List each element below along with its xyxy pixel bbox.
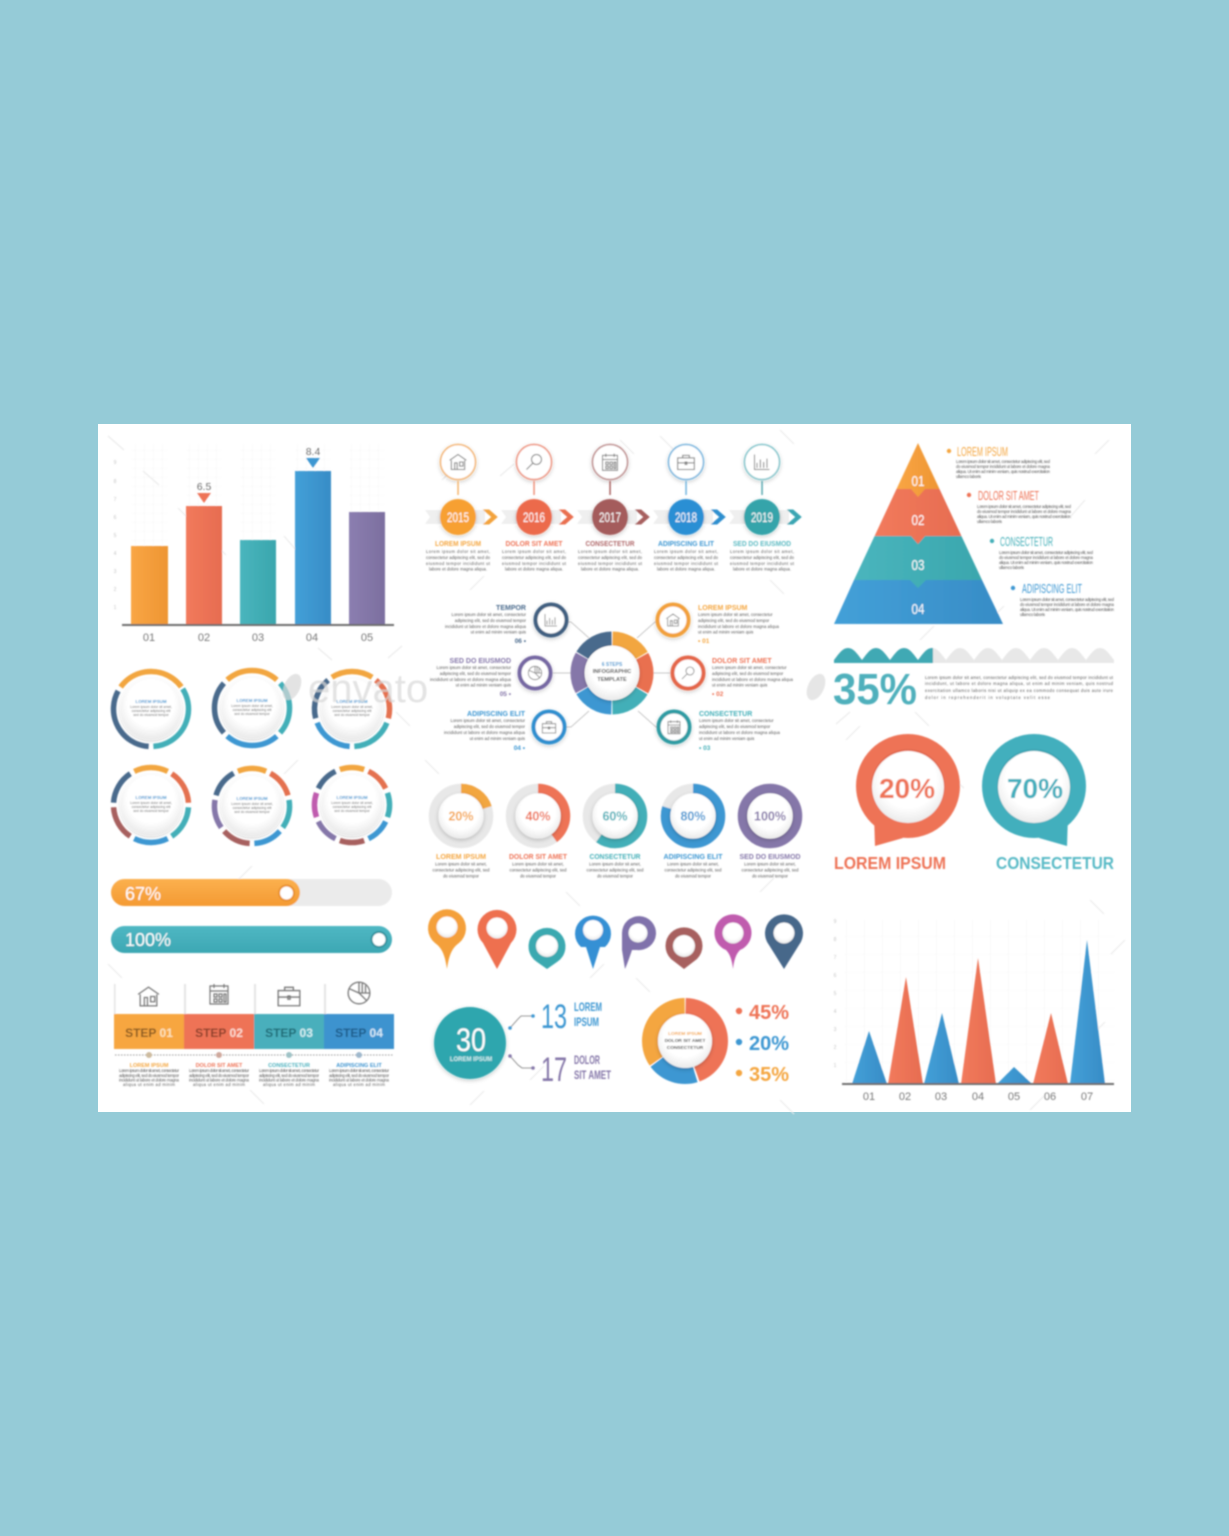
panel: bar chart: 03	[252, 632, 264, 644]
timeline step 2018	[653, 444, 725, 572]
satellite: sed do eiusmod: ut enim ad minim veniam quis	[456, 682, 511, 688]
satellite: consectetur: Lorem ipsum dolor sit amet, consectetur	[699, 718, 774, 723]
panel: bar chart: 4	[114, 551, 117, 557]
satellite: consectetur: adipiscing elit, sed do eiusmod tempor	[699, 724, 771, 729]
donut 100%: consectetur adipiscing elit, sed	[741, 868, 799, 872]
donut 100%: SED DO EIUSMOD	[740, 854, 800, 861]
satellite: dolor sit amet: DOLOR SIT AMET	[712, 658, 772, 665]
donut 80%: consectetur adipiscing elit, sed	[664, 868, 722, 872]
satellite: lorem ipsum: LOREM IPSUM	[698, 605, 748, 612]
panel: four step process: CONSECTETUR	[268, 1063, 310, 1069]
panel: bar chart: 01	[143, 632, 155, 644]
panel: donut chart with legend: LOREM IPSUM	[668, 1031, 702, 1037]
satellite: lorem ipsum: incididunt ut labore et dolore magna aliqua	[698, 624, 780, 629]
ring: seven segments: consectetur adipiscing elit	[233, 806, 271, 810]
hub ring: 6 STEPS	[602, 662, 623, 668]
pyramid label 2: Lorem ipsum dolor sit amet, consectetur adipiscing elit, sed	[977, 504, 1072, 509]
timeline step 2017	[577, 444, 649, 572]
panel: bar chart: 02	[198, 632, 210, 644]
satellite: adipiscing elit	[444, 711, 564, 752]
donut 60%: Lorem ipsum dolor sit amet,	[589, 862, 641, 866]
panel: pyramid: 03	[912, 557, 924, 574]
ring: four segments: LOREM IPSUM	[237, 698, 268, 703]
panel: cone chart: 06	[1044, 1091, 1056, 1103]
hub ring: TEMPLATE	[597, 677, 627, 683]
donut 60%: 60%	[602, 810, 628, 824]
timeline step 2018: 2018	[675, 509, 697, 525]
watermark: envato	[308, 667, 428, 711]
panel: four step process: aliqua ut enim ad minim	[333, 1082, 386, 1087]
callout: 70% speech bubble: CONSECTETUR	[996, 853, 1114, 873]
ring: six segments: LOREM IPSUM	[136, 795, 167, 800]
satellite: sed do eiusmod: incididunt ut labore et dolore magna aliqua	[430, 677, 512, 682]
timeline step 2018: ADIPISCING ELIT	[658, 541, 715, 548]
panel: 35% wave meter: incididunt, ut labore et dolore magna aliqua, ut enim ad minim veniam, quis nostrud	[925, 681, 1114, 686]
pyramid label 4: aliqua. Ut enim ad minim veniam, quis nostrud exercitation	[1020, 607, 1115, 612]
panel: pyramid	[834, 443, 1115, 624]
panel: four step process: STEP 04	[335, 1026, 383, 1040]
progress bar 67%	[111, 879, 392, 906]
panel: donut chart with legend: CONSECTETUR	[667, 1045, 704, 1051]
ring: six segments: consectetur adipiscing elit	[132, 805, 170, 809]
ring: six segments: sed do eiusmod tempor	[133, 809, 170, 813]
panel: cone chart: 6	[834, 973, 837, 979]
panel: four step process: STEP 02	[195, 1026, 243, 1040]
donut 40%: do eiusmod tempor	[520, 874, 557, 878]
panel: cone chart: 7	[834, 955, 837, 961]
satellite: lorem ipsum	[658, 604, 780, 645]
pyramid label 1: aliqua. Ut enim ad minim veniam, quis nostrud exercitation	[956, 469, 1051, 474]
panel: four step process: adipiscing elit, sed do eiusmod tempor	[259, 1073, 320, 1078]
timeline step 2017: 2017	[599, 509, 621, 525]
satellite: dolor sit amet: • 02	[712, 691, 724, 698]
satellite: consectetur: incididunt ut labore et dolore magna aliqua	[699, 730, 781, 735]
pyramid label 1: do eiusmod tempor incididunt ut labore et dolore magna	[956, 464, 1051, 469]
panel: four step process: Lorem ipsum dolor sit amet, consectetur	[119, 1068, 180, 1073]
donut 80%: 80%	[680, 810, 706, 824]
donut 100%: do eiusmod tempor	[752, 874, 789, 878]
pyramid label 3: do eiusmod tempor incididunt ut labore et dolore magna	[999, 555, 1094, 560]
pyramid label 1: Lorem ipsum dolor sit amet, consectetur adipiscing elit, sed	[956, 459, 1051, 464]
ring: five segments: consectetur adipiscing elit	[333, 709, 371, 713]
ring: eight segments: LOREM IPSUM	[337, 795, 368, 800]
satellite: dolor sit amet	[672, 658, 794, 698]
panel: bar chart: 2	[114, 587, 117, 593]
panel: 30 split stat: SIT AMET	[574, 1068, 611, 1082]
satellite: lorem ipsum: adipiscing elit, sed do eiusmod tempor	[698, 618, 770, 623]
satellite: sed do eiusmod: adipiscing elit, sed do eiusmod tempor	[440, 671, 512, 676]
satellite: sed do eiusmod: 05 •	[500, 691, 512, 698]
donut 20%: LOREM IPSUM	[436, 854, 486, 861]
panel: donut chart with legend: 20%	[749, 1033, 789, 1055]
satellite: dolor sit amet: adipiscing elit, sed do eiusmod tempor	[712, 671, 784, 676]
satellite: tempor: incididunt ut labore et dolore magna aliqua	[445, 624, 527, 629]
timeline step 2017: eiusmod tempor incididunt ut	[578, 561, 643, 566]
donut 20%: do eiusmod tempor	[443, 874, 480, 878]
panel: four step process: Lorem ipsum dolor sit amet, consectetur	[259, 1068, 320, 1073]
panel: cone chart: 05	[1008, 1091, 1020, 1103]
satellite: tempor	[445, 604, 566, 645]
panel: bar chart	[114, 444, 394, 644]
pin teal	[528, 928, 566, 969]
panel: four step process: ADIPISCING ELIT	[336, 1063, 382, 1069]
panel: 35% wave meter	[833, 647, 1114, 706]
pin purple	[622, 916, 656, 969]
timeline step 2015: LOREM IPSUM	[435, 541, 481, 548]
progress bar 67%: 67%	[125, 884, 161, 904]
panel: bar chart: 8	[114, 479, 117, 485]
ring: three segments	[99, 657, 203, 761]
panel: 30 split stat: 13	[541, 998, 567, 1036]
panel: cone chart: 03	[935, 1091, 947, 1103]
timeline step 2019: eiusmod tempor incididunt ut	[730, 561, 795, 566]
satellite: tempor: TEMPOR	[496, 605, 526, 612]
panel: 30 split stat: IPSUM	[574, 1015, 599, 1029]
timeline step 2016: Lorem ipsum dolor sit amet,	[502, 549, 566, 554]
ring: four segments: Lorem ipsum dolor sit amet,	[231, 704, 273, 708]
pin magenta	[714, 914, 752, 969]
timeline step 2018: Lorem ipsum dolor sit amet,	[654, 549, 718, 554]
panel: donut chart with legend: 35%	[749, 1064, 789, 1086]
donut 100%: Lorem ipsum dolor sit amet,	[744, 862, 796, 866]
donut 20%: Lorem ipsum dolor sit amet,	[435, 862, 487, 866]
panel: cone chart: 02	[899, 1091, 911, 1103]
callout: 70% speech bubble	[982, 734, 1114, 873]
timeline step 2015: Lorem ipsum dolor sit amet,	[426, 549, 490, 554]
pyramid label 4	[1011, 581, 1115, 617]
panel: four step process: STEP 03	[265, 1026, 313, 1040]
ring: three segments: consectetur adipiscing elit	[132, 709, 170, 713]
pyramid label 1: LOREM IPSUM	[957, 444, 1008, 459]
satellite: tempor: ut enim ad minim veniam quis	[471, 630, 526, 634]
panel: bar chart: 5	[114, 533, 117, 539]
donut 60%: do eiusmod tempor	[597, 874, 634, 878]
panel: 30 split stat	[434, 998, 611, 1089]
pyramid label 4: Lorem ipsum dolor sit amet, consectetur adipiscing elit, sed	[1020, 597, 1115, 602]
satellite: sed do eiusmod: SED DO EIUSMOD	[450, 658, 511, 665]
timeline step 2015	[425, 444, 497, 572]
pyramid label 3: aliqua. Ut enim ad minim veniam, quis nostrud exercitation	[999, 560, 1094, 565]
pyramid label 3	[990, 534, 1094, 570]
panel: pyramid: 02	[912, 512, 924, 529]
panel: pyramid: 01	[912, 473, 924, 490]
donut 80%: ADIPISCING ELIT	[664, 854, 723, 861]
panel: bar chart: 8.4	[306, 446, 320, 458]
progress bar 100%	[111, 926, 392, 953]
ring: three segments: Lorem ipsum dolor sit amet,	[130, 705, 172, 709]
panel: four step process: Lorem ipsum dolor sit amet, consectetur	[189, 1068, 250, 1073]
ring: five segments: LOREM IPSUM	[337, 699, 368, 704]
satellite: dolor sit amet: incididunt ut labore et dolore magna aliqua	[712, 677, 794, 682]
panel: four step process: adipiscing elit, sed do eiusmod tempor	[119, 1073, 180, 1078]
callout: 20% speech bubble	[834, 734, 960, 873]
ring: four segments	[199, 655, 305, 761]
pyramid label 2: DOLOR SIT AMET	[978, 488, 1039, 503]
ring: eight segments: consectetur adipiscing elit	[333, 805, 371, 809]
ring: seven segments: LOREM IPSUM	[237, 796, 268, 801]
panel: bar chart: 05	[361, 632, 373, 644]
pin brown	[666, 927, 703, 969]
panel: four step process: STEP 01	[125, 1026, 173, 1040]
ring: six segments	[99, 753, 203, 857]
pin orange	[428, 909, 466, 969]
timeline step 2016: consectetur adipiscing elit, sed do	[502, 555, 567, 560]
satellite: consectetur	[658, 711, 781, 752]
ring: five segments: Lorem ipsum dolor sit amet,	[331, 705, 373, 709]
panel: map pins	[428, 909, 803, 969]
panel: bar chart: 3	[114, 569, 117, 575]
panel: cone chart: 3	[834, 1027, 837, 1033]
satellite: consectetur: • 03	[699, 745, 711, 752]
satellite: adipiscing elit: adipiscing elit, sed do eiusmod tempor	[454, 724, 526, 729]
timeline step 2016: 2016	[523, 509, 545, 525]
panel: four step process: DOLOR SIT AMET	[196, 1063, 243, 1069]
satellite: dolor sit amet: ut enim ad minim veniam quis	[712, 682, 767, 688]
satellite: tempor: Lorem ipsum dolor sit amet, consectetur	[452, 612, 527, 617]
panel: cone chart: 8	[834, 937, 837, 943]
timeline step 2017: labore et dolore magna aliqua.	[581, 566, 639, 572]
satellite: adipiscing elit: Lorem ipsum dolor sit amet, consectetur	[451, 718, 526, 723]
satellite: consectetur: CONSECTETUR	[699, 711, 752, 718]
donut 60%: consectetur adipiscing elit, sed	[586, 868, 644, 872]
panel: cone chart: 4	[834, 1009, 837, 1015]
donut 80%: do eiusmod tempor	[675, 874, 712, 878]
panel: cone chart: 01	[863, 1091, 875, 1103]
timeline step 2019: Lorem ipsum dolor sit amet,	[730, 549, 794, 554]
timeline step 2019: 2019	[751, 509, 773, 525]
satellite: adipiscing elit: ut enim ad minim veniam quis	[470, 736, 525, 741]
panel: four step process: incididunt ut labore et dolore magna	[189, 1078, 250, 1082]
panel: bar chart: 6	[114, 515, 117, 521]
hub ring	[565, 626, 659, 720]
ring: seven segments	[199, 753, 305, 859]
timeline step 2016: DOLOR SIT AMET	[506, 541, 563, 548]
panel: cone chart: 2	[834, 1045, 837, 1051]
panel: four step process: incididunt ut labore et dolore magna	[119, 1078, 180, 1082]
panel: four step process: adipiscing elit, sed do eiusmod tempor	[189, 1073, 250, 1078]
panel: bar chart: 04	[306, 632, 318, 644]
panel: 30 split stat: LOREM IPSUM	[450, 1057, 492, 1063]
pyramid label 1	[947, 444, 1051, 479]
donut 40%: 40%	[525, 810, 551, 824]
panel: cone chart: 07	[1081, 1091, 1093, 1103]
panel: 30 split stat: 17	[541, 1051, 567, 1089]
donut 40%: Lorem ipsum dolor sit amet,	[512, 862, 564, 866]
timeline step 2019	[729, 444, 801, 572]
panel: four step process: Lorem ipsum dolor sit amet, consectetur	[329, 1068, 390, 1073]
ring: four segments: consectetur adipiscing elit	[233, 708, 271, 712]
pyramid label 4: ullamco laboris	[1020, 612, 1045, 617]
callout: 20% speech bubble: LOREM IPSUM	[834, 853, 946, 873]
timeline step 2017: Lorem ipsum dolor sit amet,	[578, 549, 642, 554]
panel: four step process: incididunt ut labore et dolore magna	[329, 1078, 390, 1082]
ring: eight segments: sed do eiusmod tempor	[334, 809, 371, 813]
donut 60%	[586, 788, 644, 878]
panel: bar chart: 6.5	[197, 481, 211, 493]
satellite: adipiscing elit: incididunt ut labore et dolore magna aliqua	[444, 730, 526, 735]
donut 60%: CONSECTETUR	[590, 854, 640, 861]
timeline step 2019: SED DO EIUSMOD	[733, 541, 791, 548]
panel: donut chart with legend: DOLOR SIT AMET	[665, 1038, 705, 1044]
panel: 30 split stat: LOREM	[574, 1000, 602, 1014]
panel: cone chart: 5	[834, 991, 837, 997]
timeline step 2015: 2015	[447, 509, 469, 525]
ring: six segments: Lorem ipsum dolor sit amet,	[130, 801, 172, 805]
ring: five segments: sed do eiusmod tempor	[334, 713, 371, 717]
pin red	[477, 910, 516, 969]
satellite: adipiscing elit: ADIPISCING ELIT	[467, 711, 526, 718]
satellite: consectetur: ut enim ad minim veniam quis	[699, 736, 754, 741]
donut 20%	[432, 788, 490, 878]
timeline step 2015: labore et dolore magna aliqua.	[429, 566, 487, 572]
panel: four step process: incididunt ut labore et dolore magna	[259, 1078, 320, 1082]
ring: eight segments: Lorem ipsum dolor sit amet,	[331, 801, 373, 805]
timeline step 2019: labore et dolore magna aliqua.	[733, 566, 791, 572]
pyramid label 3: Lorem ipsum dolor sit amet, consectetur adipiscing elit, sed	[999, 550, 1094, 555]
panel: four step process: LOREM IPSUM	[130, 1063, 169, 1069]
panel: 30 split stat: 30	[456, 1022, 486, 1058]
timeline step 2015: eiusmod tempor incididunt ut	[426, 561, 491, 566]
donut 40%	[509, 788, 568, 878]
panel: four step process: aliqua ut enim ad minim	[123, 1082, 176, 1087]
donut 100%: 100%	[754, 810, 786, 824]
donut 40%: DOLOR SIT AMET	[509, 854, 568, 861]
ring: seven segments: sed do eiusmod tempor	[234, 810, 271, 814]
watermark	[279, 667, 829, 711]
pin navy	[765, 914, 803, 969]
panel: bar chart: 1	[114, 605, 117, 611]
timeline step 2017: consectetur adipiscing elit, sed do	[578, 555, 643, 560]
panel: cone chart: 1	[834, 1063, 837, 1069]
panel: cone chart: 9	[834, 919, 837, 925]
donut 20%: 20%	[448, 810, 474, 824]
satellite: lorem ipsum: Lorem ipsum dolor sit amet, consectetur	[698, 612, 773, 617]
panel: 35% wave meter: 35%	[833, 665, 917, 714]
panel: bar chart: 7	[114, 497, 117, 503]
pyramid label 2: do eiusmod tempor incididunt ut labore et dolore magna	[977, 509, 1072, 514]
panel: bar chart: 9	[114, 460, 117, 466]
satellite: tempor: adipiscing elit, sed do eiusmod tempor	[455, 618, 527, 623]
satellite: sed do eiusmod: Lorem ipsum dolor sit amet, consectetur	[437, 665, 512, 670]
timeline step 2015: consectetur adipiscing elit, sed do	[426, 555, 491, 560]
timeline step 2016	[501, 444, 573, 572]
pyramid label 4: do eiusmod tempor incididunt ut labore et dolore magna	[1020, 602, 1115, 607]
hub ring: INFOGRAPHIC	[593, 669, 631, 675]
panel: donut chart with legend: 45%	[749, 1002, 789, 1024]
pyramid label 3: CONSECTETUR	[1000, 534, 1053, 549]
timeline step 2018: eiusmod tempor incididunt ut	[654, 561, 719, 566]
progress bar 100%: 100%	[125, 930, 171, 950]
panel: pyramid: 04	[912, 601, 924, 618]
ring: four segments: sed do eiusmod tempor	[234, 712, 271, 716]
ring: eight segments	[302, 755, 402, 855]
timeline step 2018: consectetur adipiscing elit, sed do	[654, 555, 719, 560]
ring: seven segments: Lorem ipsum dolor sit amet,	[231, 802, 273, 806]
panel: four step process	[114, 982, 394, 1087]
panel: six-step hub diagram	[430, 604, 794, 752]
timeline step 2016: labore et dolore magna aliqua.	[505, 566, 563, 572]
donut 80%	[664, 788, 723, 878]
panel: cone chart: 04	[972, 1091, 984, 1103]
timeline step 2019: consectetur adipiscing elit, sed do	[730, 555, 795, 560]
panel: 30 split stat: DOLOR	[574, 1053, 600, 1067]
callout: 20% speech bubble: 20%	[879, 773, 935, 804]
panel: four step process: aliqua ut enim ad minim	[193, 1082, 246, 1087]
donut 20%: consectetur adipiscing elit, sed	[432, 868, 490, 872]
donut 100%	[740, 788, 800, 878]
ring: three segments: sed do eiusmod tempor	[133, 713, 170, 717]
satellite: lorem ipsum: • 01	[698, 638, 710, 645]
pyramid label 4: ADIPISCING ELIT	[1022, 581, 1082, 596]
panel: 35% wave meter: Lorem ipsum dolor sit amet, consectetur adipiscing elit, sed do eiusmod tempor incididunt ut	[925, 675, 1114, 680]
satellite: tempor: 06 •	[515, 638, 527, 645]
panel: cone chart	[834, 919, 1115, 1103]
panel: six circular step diagrams	[99, 655, 405, 859]
pyramid label 2: aliqua. Ut enim ad minim veniam, quis nostrud exercitation	[977, 514, 1072, 519]
panel: donut chart with legend	[636, 992, 789, 1090]
panel: percentage donuts	[432, 788, 800, 878]
pyramid label 2: ullamco laboris	[977, 519, 1002, 524]
panel: 35% wave meter: dolor in reprehenderit in voluptate velit esse	[925, 695, 1051, 700]
ring: five segments	[299, 656, 405, 762]
timeline step 2016: eiusmod tempor incididunt ut	[502, 561, 567, 566]
satellite: lorem ipsum: ut enim ad minim veniam quis	[698, 630, 753, 634]
timeline step 2018: labore et dolore magna aliqua.	[657, 566, 715, 572]
panel: 35% wave meter: exercitation ullamco laboris nisi ut aliquip ex ea commodo consequat duis aute irure	[925, 688, 1114, 693]
satellite: dolor sit amet: Lorem ipsum dolor sit amet, consectetur	[712, 665, 787, 670]
satellite: sed do eiusmod	[430, 658, 550, 698]
satellite: adipiscing elit: 04 •	[514, 745, 526, 752]
panel: four step process: adipiscing elit, sed do eiusmod tempor	[329, 1073, 390, 1078]
pyramid label 1: ullamco laboris	[956, 474, 981, 479]
pyramid label 3: ullamco laboris	[999, 565, 1024, 570]
timeline step 2017: CONSECTETUR	[586, 541, 634, 548]
ring: three segments: LOREM IPSUM	[136, 699, 167, 704]
white infographic panel	[98, 424, 1131, 1112]
pyramid label 2	[967, 488, 1072, 524]
pin blue	[575, 916, 611, 969]
callout: 70% speech bubble: 70%	[1007, 773, 1063, 804]
donut 40%: consectetur adipiscing elit, sed	[509, 868, 567, 872]
panel: timeline 2015-2019	[425, 444, 801, 572]
panel: four step process: aliqua ut enim ad minim	[263, 1082, 316, 1087]
donut 80%: Lorem ipsum dolor sit amet,	[667, 862, 719, 866]
